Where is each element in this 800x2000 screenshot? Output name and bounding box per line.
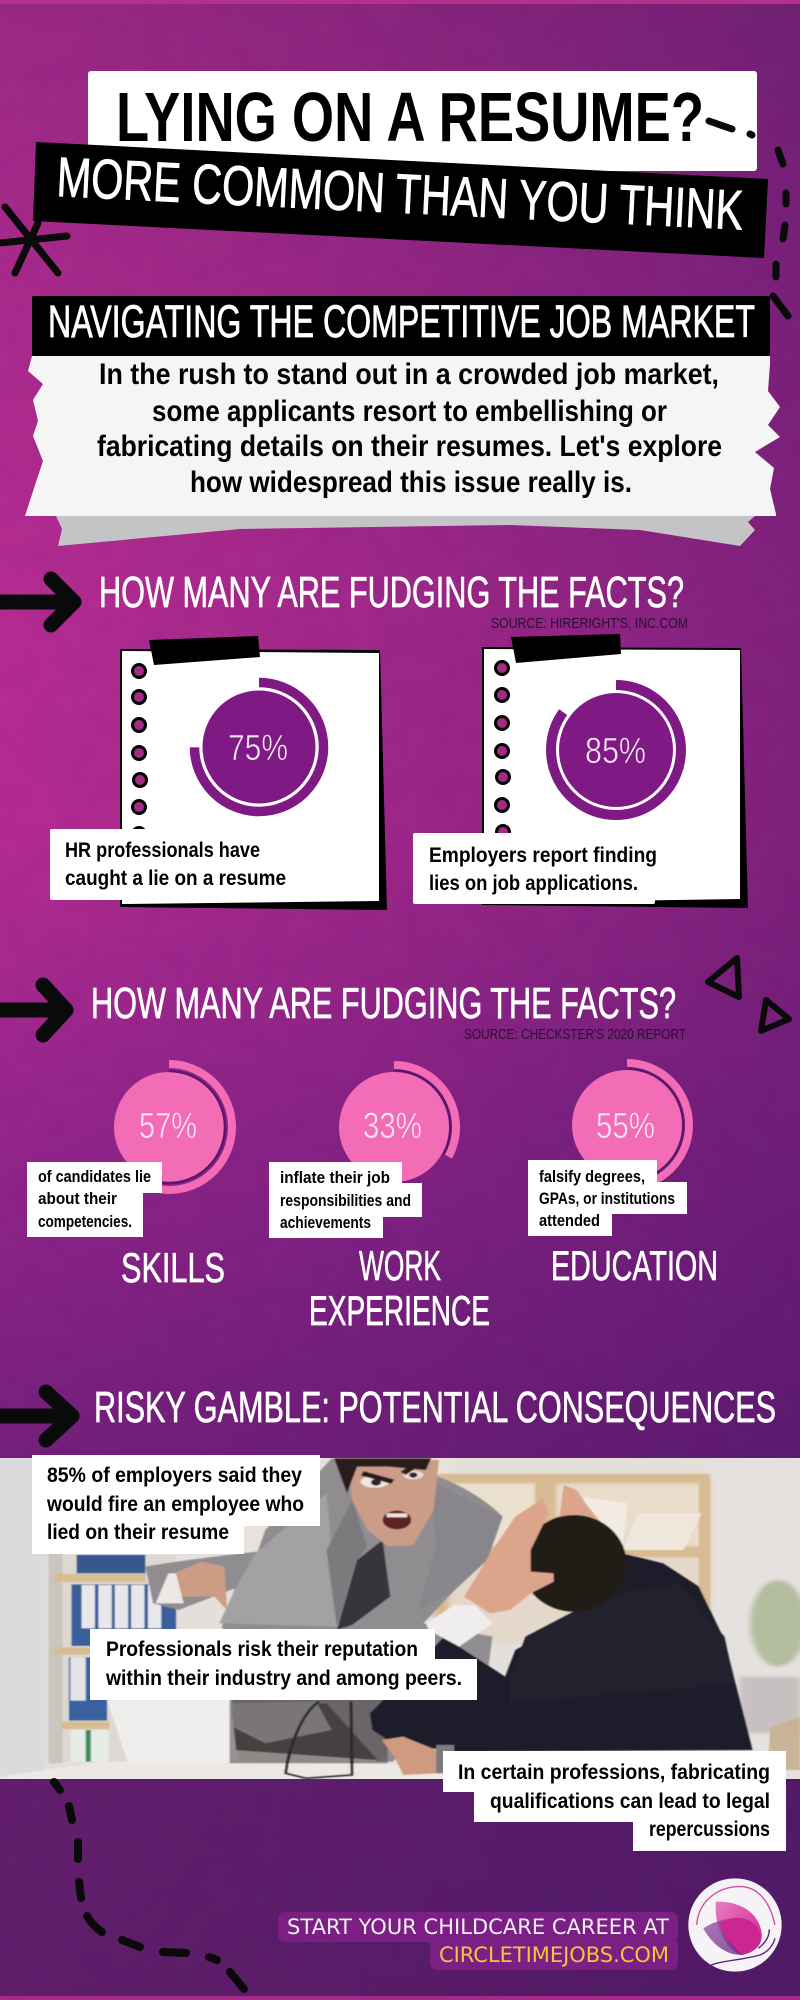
caption: lies on job applications. [429,871,638,895]
torn paper intro: how widespread this issue really is. [190,466,632,499]
torn paper intro: In the rush to stand out in a crowded job market, [99,358,719,391]
caption: attended [539,1212,600,1230]
caption: competencies. [38,1213,132,1231]
label: work experience: EXPERIENCE [309,1287,490,1334]
pointing hand [166,1562,227,1610]
caption: legal: qualifications can lead to legal [490,1789,770,1813]
caption [27,1162,162,1237]
caption [269,1162,422,1238]
spiral holes [132,664,146,840]
donut chart 85%: 85% [585,730,646,771]
call to action: CIRCLETIMEJOBS.COM [439,1943,669,1967]
donut chart 85% [551,685,681,815]
label: education: EDUCATION [551,1242,718,1289]
front hand [464,1498,554,1613]
left shelf [48,1550,63,1763]
caption: of candidates lie [38,1168,151,1186]
arrow 2 [0,985,66,1035]
torn paper intro: fabricating details on their resumes. Let's explore [97,430,722,463]
torn paper intro: some applicants resort to embellishing or [152,395,667,428]
caption: HR professionals have [65,838,260,862]
caption: achievements [280,1214,371,1232]
source: SOURCE: HIRERIGHT'S, INC.COM [491,615,688,632]
icon: triangles [708,958,789,1031]
glasses [286,1702,352,1778]
panel: note 85% [413,634,748,908]
caption [50,829,286,900]
panel: note 75% [50,636,387,910]
caption: reputation: within their industry and among peers. [105,1666,462,1690]
caption: fired [32,1455,320,1554]
donut chart 75%: 75% [228,727,288,768]
caption: Employers report finding [429,843,657,867]
caption: responsibilities and [280,1192,411,1210]
label: work experience [309,1242,490,1334]
stat: work experience: 33% [363,1105,422,1146]
decorative dashed curve [54,1782,244,1989]
arrow 1 [0,579,74,625]
spiral holes [496,662,510,838]
shelf frame [439,1474,709,1482]
cuff [426,1605,492,1647]
caption: fired: lied on their resume [47,1520,229,1544]
caption: legal: In certain professions, fabricating [458,1760,770,1784]
stat: education: 55% [596,1105,655,1146]
torn paper intro [25,356,780,546]
grey suit man [145,1458,503,1762]
caption: fired: 85% of employers said they [47,1463,302,1487]
dark suit man [370,1553,753,1752]
caption: inflate their job [280,1169,390,1187]
caption: reputation [90,1629,477,1700]
caption: reputation: Professionals risk their reputation [106,1637,418,1661]
caption: caught a lie on a resume [65,866,286,890]
arrow 3 [0,1392,72,1440]
tape [149,636,260,665]
laptop [107,1700,239,1773]
logo [688,1878,782,1972]
caption: about their [38,1190,118,1208]
photo: angry boss and employee [0,1450,800,1783]
tape [511,634,621,663]
stat: skills: 57% [139,1105,197,1146]
desk [0,1762,449,1783]
back hand [559,1485,602,1523]
caption [528,1160,687,1236]
fist [382,1737,439,1775]
chair [768,1717,800,1770]
donut chart 75% [194,682,324,812]
call to action [278,1912,678,1970]
call to action: START YOUR CHILDCARE CAREER AT [287,1915,669,1939]
caption: legal: repercussions [649,1817,770,1841]
stat: work experience [269,1065,456,1238]
stat: skills [27,1064,232,1237]
caption: fired: would fire an employee who [46,1492,304,1516]
head [347,1460,439,1547]
icon: asterisk [0,207,67,273]
caption [413,833,657,904]
stat: education [528,1063,689,1236]
source: SOURCE: CHECKSTER'S 2020 REPORT [464,1026,686,1043]
caption: falsify degrees, [539,1168,645,1186]
caption: legal [443,1751,786,1851]
decorative dashed line: title right [709,121,788,316]
caption: GPAs, or institutions [539,1190,675,1208]
label: skills: SKILLS [121,1244,225,1291]
label: work experience: WORK [359,1242,441,1289]
